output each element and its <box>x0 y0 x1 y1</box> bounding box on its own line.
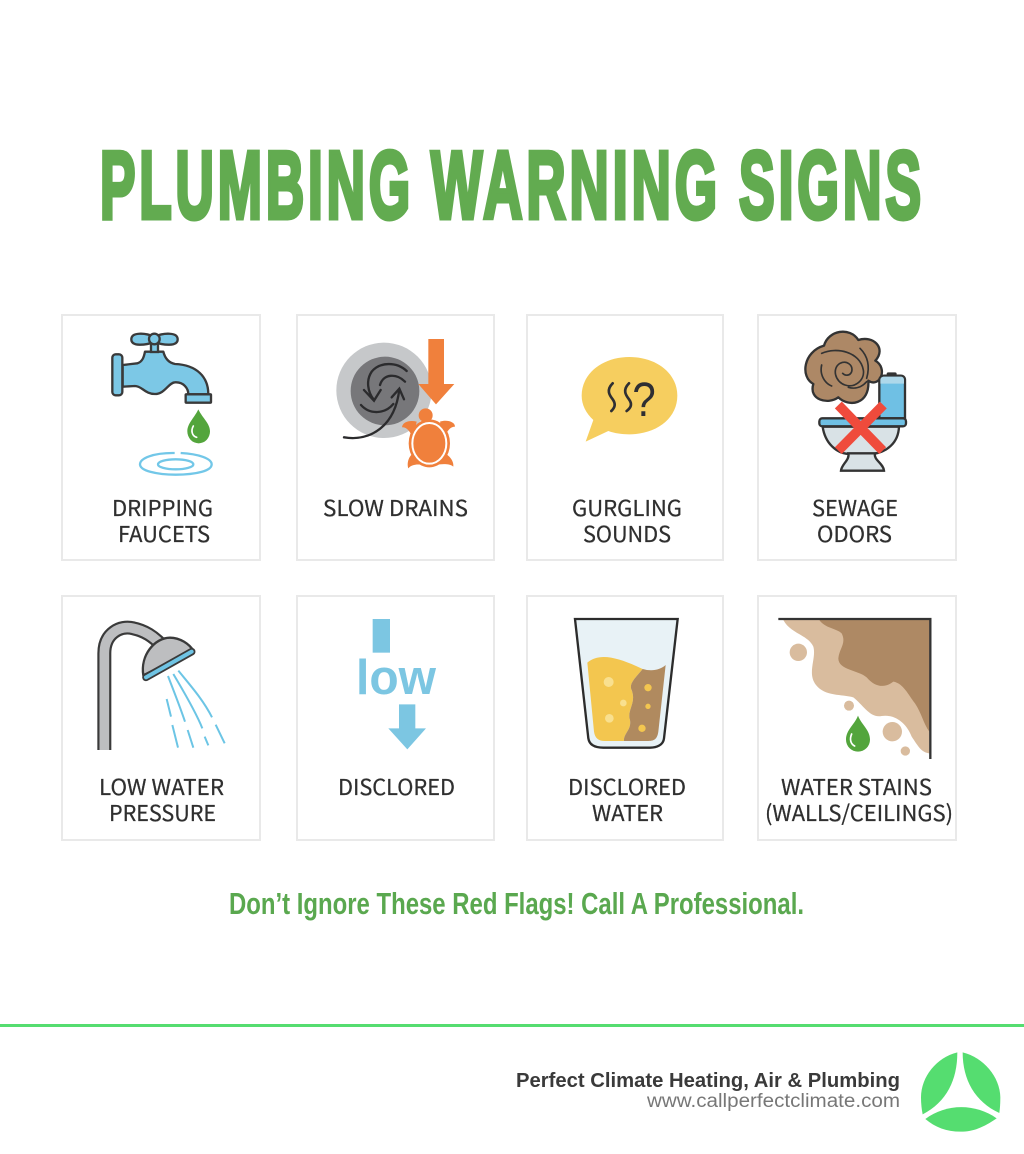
title: PLUMBING <box>100 132 414 239</box>
label: low water pressure: LOW WATER <box>99 770 224 802</box>
panel: disclored water <box>527 596 723 840</box>
icon: toilet with odor cloud <box>805 332 906 471</box>
icon: stained ceiling corner <box>778 619 930 759</box>
footer rule <box>0 1024 1024 1027</box>
label: sewage odors: ODORS <box>817 517 892 549</box>
panel: sewage odors <box>758 315 956 560</box>
label: dripping faucets: DRIPPING <box>112 491 213 523</box>
panel: disclored <box>297 596 494 840</box>
label: slow drains: SLOW DRAINS <box>323 491 468 523</box>
label: water stains <box>765 770 953 828</box>
icon: drain, arrow and turtle <box>336 339 455 468</box>
label: water stains: WATER STAINS <box>781 770 932 802</box>
label: gurgling sounds: GURGLING <box>572 491 682 523</box>
logo <box>921 1052 1000 1132</box>
label: disclored water: DISCLORED <box>568 770 686 802</box>
panel: dripping faucets <box>62 315 260 560</box>
icon: low with down arrow <box>356 619 437 749</box>
panel: low water pressure <box>62 596 260 840</box>
panel: water stains <box>758 596 956 840</box>
icon: shower head <box>104 628 225 750</box>
title <box>100 132 925 239</box>
label: disclored: DISCLORED <box>338 770 455 802</box>
panel: gurgling sounds <box>527 315 723 560</box>
label: low water pressure <box>99 770 224 828</box>
footer: website: www.callperfectclimate.com <box>646 1091 900 1112</box>
title: WARNING <box>431 132 721 239</box>
icon: glass of discolored water <box>575 619 678 748</box>
icon: speech bubble <box>582 357 677 442</box>
label: gurgling sounds <box>572 491 682 549</box>
panel: slow drains <box>297 315 494 560</box>
label: dripping faucets <box>112 491 213 549</box>
label: water stains: (WALLS/CEILINGS) <box>765 796 953 828</box>
icon: low with down arrow: low <box>356 650 437 705</box>
tagline: Don’t Ignore These Red Flags! Call A Professional. <box>229 886 804 921</box>
label: gurgling sounds: SOUNDS <box>583 517 671 549</box>
label: dripping faucets: FAUCETS <box>118 517 210 549</box>
label: disclored water <box>568 770 686 828</box>
icon: speech bubble: ? <box>632 373 656 427</box>
label: sewage odors: SEWAGE <box>812 491 898 523</box>
label: sewage odors <box>812 491 898 549</box>
footer: company name: Perfect Climate Heating, Air & Plumbing <box>516 1070 900 1092</box>
icon: dripping faucet <box>112 334 212 475</box>
label: disclored water: WATER <box>592 796 663 828</box>
label: low water pressure: PRESSURE <box>109 796 216 828</box>
